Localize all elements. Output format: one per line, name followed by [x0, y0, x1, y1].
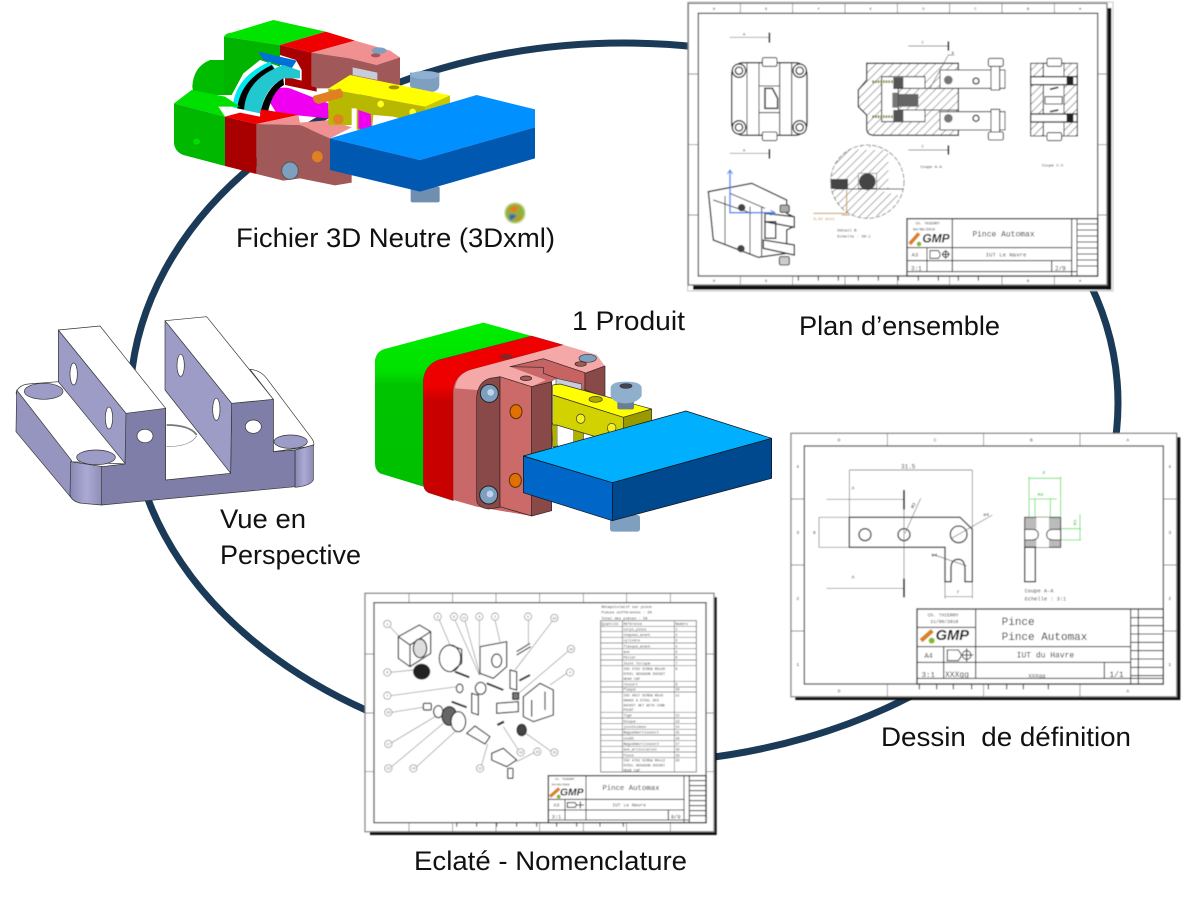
parts table: 5: [675, 651, 677, 655]
parts table: chapeau_avant: [623, 633, 651, 638]
title block: 8/9: [671, 815, 681, 821]
title block: IUT du Havre: [1017, 652, 1074, 661]
part callouts: 5: [527, 615, 529, 619]
parts table: Joint Torique: [623, 661, 651, 666]
parts table: Pince: [623, 753, 634, 758]
parts table: 20: [675, 760, 680, 764]
title block: IUT Le Havre: [986, 251, 1027, 258]
parts table: ISO 4762 SCREW M3x20: [623, 668, 665, 672]
view: detail B: 0,02 mini: [813, 217, 835, 222]
sheet frame: 3: [796, 530, 799, 536]
parts table: Pièces différentes : 20: [601, 610, 652, 615]
model: green body: [375, 323, 532, 487]
sheet frame: H: [713, 8, 715, 12]
view: part profile: A: [852, 574, 855, 580]
process ring: [130, 43, 1118, 763]
part: base flanges: [16, 369, 314, 505]
view: section A-A: C: [922, 41, 925, 45]
title block: A3: [912, 253, 918, 259]
model: blue plate: [330, 95, 535, 202]
parts table: GRADE A STEEL HEX: [623, 699, 660, 703]
sheet frame: A: [1126, 688, 1129, 694]
model: yellow clamp: [552, 382, 652, 447]
panel: perspective view part: [16, 317, 314, 505]
view: section A-A: B: [952, 52, 955, 56]
part callouts: 20: [569, 647, 573, 651]
title block: 04/09/2010: [552, 782, 570, 786]
sheet frame: F: [818, 8, 820, 12]
title block: 3:1: [922, 672, 935, 680]
part callouts: 19: [535, 750, 539, 754]
sheet frame: D: [838, 688, 841, 694]
sheet frame: E: [870, 8, 872, 12]
parts table: 8: [675, 668, 677, 672]
model: seals and cylinder: [233, 52, 328, 118]
sheet frame: A: [1079, 280, 1082, 284]
parts table: axe: [623, 651, 630, 655]
view: section A-A: Coupe A-A: [920, 166, 942, 170]
sheet frame: D: [838, 437, 841, 443]
view: section A-A: Echelle : 3:1: [1025, 596, 1066, 602]
title block: [917, 609, 1163, 689]
view: section A-A: Coupe A-A: [1025, 589, 1054, 595]
title block: Ch. THIERRY: [555, 777, 575, 781]
exploded parts: [398, 625, 553, 778]
model: blue plate: [523, 411, 772, 521]
view: detail B: Echelle : 20:1: [837, 235, 871, 240]
title block: Pince Automax: [602, 785, 660, 793]
title block: Pince Automax: [972, 231, 1035, 240]
view: section A-A: 8: [1042, 470, 1045, 476]
parts table: 19: [675, 754, 680, 758]
part callouts: 11: [462, 616, 466, 620]
part callouts: 7: [386, 694, 388, 698]
view: part profile: 31.5: [901, 464, 916, 471]
parts table: 2: [675, 634, 677, 638]
model: pink body: [453, 345, 605, 516]
part: ribs: [58, 317, 273, 473]
view: front: [730, 33, 807, 159]
title block: 2/9: [1055, 266, 1066, 273]
label: Plan d'ensemble: Plan d’ensemble: [799, 311, 1000, 341]
title block: 3:1: [911, 265, 922, 272]
sheet frame: B: [1027, 280, 1030, 284]
sheet frame: 1: [796, 662, 799, 668]
parts table: 6: [675, 657, 677, 661]
sheet frame: A: [1126, 437, 1129, 443]
title block: Ch. THIERRY: [916, 222, 941, 227]
parts table: 1: [675, 628, 677, 632]
parts table: Disque: [623, 719, 636, 724]
view: section A-A: M4: [1038, 492, 1043, 498]
label: Fichier 3D Neutre: Fichier 3D Neutre (3Dxml): [236, 223, 555, 253]
sheet frame: [791, 433, 1180, 700]
parts table: 3: [675, 640, 677, 644]
panel: Plan d'ensemble drawing: [688, 2, 1113, 291]
sheet frame: 1: [1168, 662, 1171, 668]
parts table: 14: [675, 726, 680, 730]
parts table: HEAD CAP: [623, 769, 640, 773]
view: detail B: [813, 145, 904, 240]
label: Vue en Perspective: [220, 504, 361, 570]
part callouts: [384, 613, 575, 772]
sheet frame: D: [922, 8, 925, 12]
panel: central product model: [375, 323, 772, 532]
parts table: 12: [675, 715, 680, 719]
parts table: 9: [675, 684, 677, 688]
part callouts: 15: [552, 751, 556, 755]
parts table: Récapitulatif sur pince: [601, 605, 652, 610]
model: lower half: [174, 90, 352, 185]
sheet frame: 2: [1168, 596, 1171, 602]
parts table: cylindre: [623, 639, 640, 644]
title block: 04/09/2010: [913, 228, 935, 233]
view: section A-A: C: [922, 145, 925, 149]
view: part profile: ø4: [932, 553, 937, 559]
label: Vue en Perspective: Vue en: [220, 504, 306, 534]
title block: XXXgg: [945, 671, 969, 680]
parts table: 7: [675, 662, 677, 666]
view: section A-A: [1025, 470, 1081, 602]
model: bottom bolt: [610, 515, 640, 532]
part callouts: 16: [386, 711, 390, 715]
title block: XXXgg: [1028, 673, 1045, 680]
parts table: Tige: [623, 714, 632, 719]
part callouts: 14: [411, 767, 415, 771]
title block: GMP: [922, 232, 951, 246]
title block: Pince: [1002, 617, 1035, 629]
part callouts: 13: [386, 767, 390, 771]
parts table: Quantité: [602, 622, 618, 627]
sheet frame: G: [765, 280, 767, 284]
view: section A-A: [858, 41, 1005, 170]
part callouts: 4: [569, 671, 571, 675]
parts table: flasque_avant: [623, 644, 651, 649]
parts table: ISO 4762 SCREW M4x12: [623, 760, 665, 764]
panel: 3D neutral file exploded model: [174, 20, 535, 202]
part callouts: 17: [386, 742, 390, 746]
parts table: jointkidoes: [623, 725, 646, 730]
parts table: POINT: [623, 709, 634, 713]
parts table: HEAD CAP: [623, 678, 640, 682]
sheet frame: B: [1030, 437, 1033, 443]
parts table: 18: [675, 749, 680, 753]
icon: 3DS logo: [505, 203, 525, 223]
sheet frame: [365, 593, 717, 835]
part callouts: 1: [386, 622, 388, 626]
part callouts: 2: [494, 615, 496, 619]
parts table: [601, 605, 696, 773]
label: Eclaté - Nomenclature: Eclaté - Nomenclature: [414, 846, 687, 876]
sheet frame: 2: [796, 596, 799, 602]
sheet frame: G: [765, 8, 767, 12]
parts table: 4: [675, 645, 677, 649]
view: part profile: 7: [956, 589, 959, 595]
parts table: ressort: [623, 684, 638, 688]
parts table: 10: [675, 689, 680, 693]
view: isometric: [708, 170, 794, 265]
view: part profile: A: [852, 485, 855, 491]
title block: IUT Le Havre: [612, 803, 646, 809]
view: detail B: Détail B: [837, 229, 857, 234]
part callouts: 12: [478, 767, 482, 771]
model: red plate: [423, 336, 563, 501]
part callouts: 6: [386, 671, 388, 675]
model: upper half: [192, 20, 400, 95]
view: part profile: M3: [910, 502, 918, 510]
title block: A3: [553, 803, 559, 809]
title block: GMP: [560, 787, 584, 798]
parts table: Plaque: [623, 688, 636, 693]
view: front: A: [743, 33, 746, 37]
parts table: STEEL HEXAGON SOCKET: [623, 765, 665, 769]
sheet frame: 3: [1168, 530, 1171, 536]
parts table: BagueAmortisseur2: [623, 742, 659, 747]
part callouts: 8: [478, 615, 480, 619]
title block: 3:1: [552, 815, 561, 821]
panel: Dessin de définition drawing: [791, 433, 1180, 700]
sheet frame: [688, 2, 1113, 291]
title block: A4: [924, 653, 933, 661]
model: yellow clamp: [313, 71, 450, 135]
sheet frame: C: [934, 437, 937, 443]
panel: Eclaté Nomenclature drawing: [365, 593, 717, 835]
part callouts: 10: [552, 616, 556, 620]
view: part profile: ø4: [983, 512, 989, 518]
sheet frame: 4: [1168, 464, 1171, 470]
sheet frame: A: [1079, 8, 1082, 12]
parts table: axe_articulation: [623, 748, 657, 753]
title block: GMP: [936, 628, 969, 644]
parts table: 11: [675, 694, 680, 698]
title block: [457, 776, 706, 827]
sheet frame: H: [713, 280, 715, 284]
part callouts: 3: [437, 615, 439, 619]
part callouts: 6: [453, 615, 455, 619]
view: part profile: [813, 464, 992, 598]
parts table: 15: [675, 732, 680, 736]
parts table: Numéro: [675, 622, 688, 627]
view: front: A: [743, 150, 746, 154]
label: Dessin de définition: Dessin de définition: [881, 722, 1131, 752]
sheet frame: B: [1027, 8, 1030, 12]
label: Vue en Perspective: Perspective: [220, 540, 361, 570]
title block: 11/09/2010: [930, 619, 958, 625]
title block: Pince Automax: [1002, 632, 1088, 644]
parts table: BagueAmortisseur1: [623, 731, 659, 736]
part: holes: [24, 354, 307, 465]
parts table: Total des pièces : 28: [601, 616, 647, 621]
view: section C-C: Coupe C-C: [1042, 164, 1064, 168]
parts table: 16: [675, 737, 680, 741]
sheet frame: 4: [796, 464, 799, 470]
view: section C-C: [1031, 58, 1077, 168]
model: screws and holes: [480, 384, 522, 504]
part callouts: 18: [519, 751, 523, 755]
title block: Ch. THIERRY: [928, 613, 959, 619]
parts table: Référence: [623, 622, 642, 627]
parts table: vis05: [623, 736, 634, 741]
parts table: ISO 4027 SCREW M3x6: [623, 694, 663, 698]
title block: [798, 219, 1098, 281]
parts table: corps_pince: [623, 627, 646, 632]
sheet frame: C: [974, 8, 977, 12]
label: 1 Produit: 1 Produit: [572, 306, 686, 336]
parts table: STEEL HEXAGON SOCKET: [623, 673, 665, 677]
view: part profile: 8: [813, 530, 816, 536]
parts table: Palier: [623, 656, 636, 661]
parts table: SOCKET SET WITH CONE: [623, 704, 665, 708]
title block: 1/1: [1109, 671, 1124, 680]
parts table: 13: [675, 720, 680, 724]
view: section A-A: M3: [1072, 520, 1078, 525]
parts table: 17: [675, 743, 680, 747]
